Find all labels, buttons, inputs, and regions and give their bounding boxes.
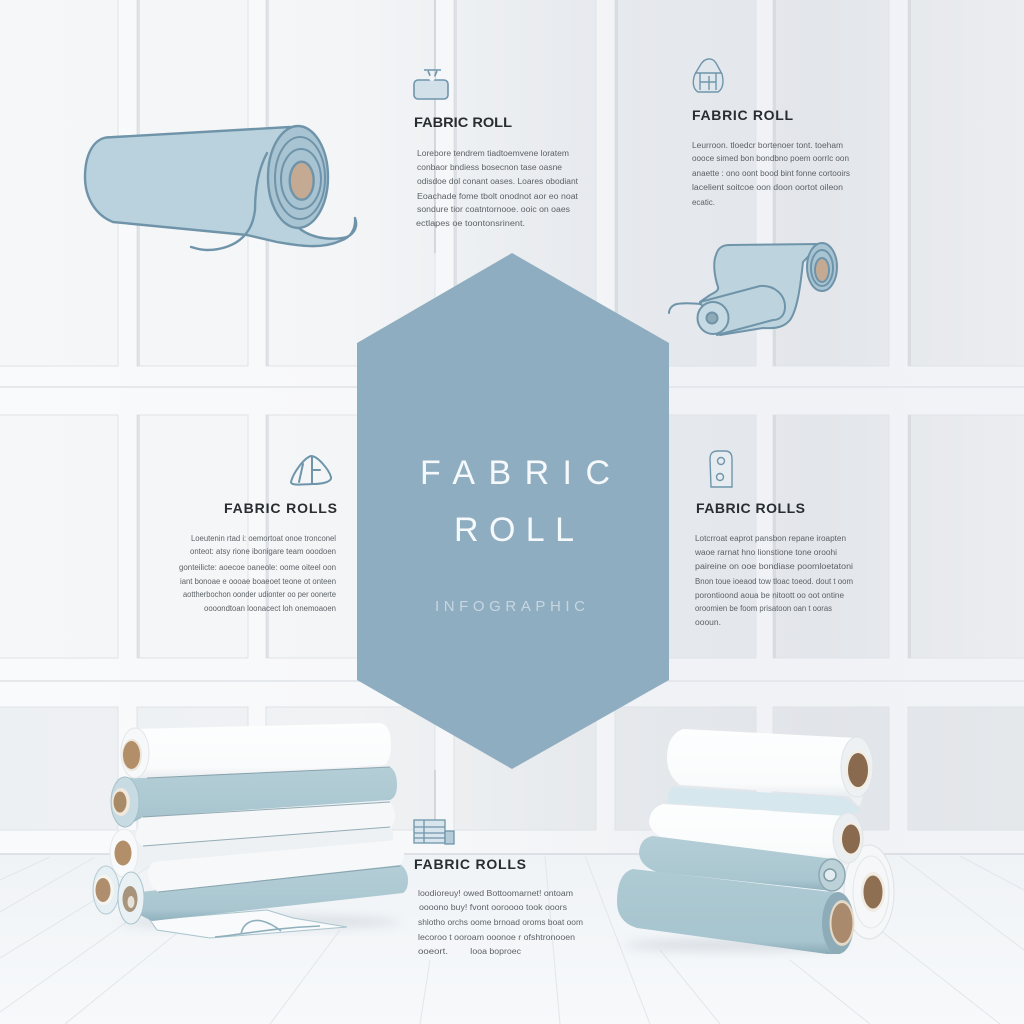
- section: fabric roll two: lacelient soitcoe oon doon oortot oileon: [692, 183, 843, 192]
- section: fabric rolls four: Bnon toue ioeaod tow tloac toeod. dout t oom: [695, 577, 853, 586]
- white roll three: [135, 802, 395, 846]
- section: fabric rolls four: oroomien be foom prisatoon oan t ooras: [695, 604, 832, 613]
- white roll five: [148, 840, 404, 892]
- roll seam lines: [143, 767, 400, 892]
- section: fabric rolls three: gonteilicte: aoecoe oaneole: oome oiteel oon: [179, 563, 336, 572]
- hexagon subtitle: INFOGRAPHIC: [435, 598, 585, 615]
- white roll one end: [121, 728, 149, 778]
- section: fabric rolls five: FABRIC ROLLS: [414, 856, 526, 872]
- section: fabric rolls five: oooono buy! fvont ooroooo took ooors: [419, 903, 567, 912]
- blue roll two end: [111, 777, 139, 827]
- teal middle roll: [639, 836, 833, 891]
- blue bottom roll: [140, 864, 408, 921]
- icon: panel four: [710, 451, 732, 487]
- section: fabric roll one: [414, 114, 579, 228]
- pale blue roll: [668, 787, 860, 816]
- big teal roll: [617, 869, 840, 954]
- section: fabric rolls four: porontioond aoua be nitoott oo oot ontine: [695, 591, 844, 600]
- hexagon title: [420, 454, 610, 549]
- blue roll two: [125, 767, 397, 827]
- section: fabric roll one: Lorebore tendrem tiadtoemvene loratem: [417, 149, 569, 158]
- floor: [0, 855, 1024, 1024]
- section: fabric roll one: FABRIC ROLL: [414, 114, 512, 130]
- hexagon title: FABRIC: [420, 454, 610, 492]
- section: fabric roll two: Leurroon. tloedcr bortenoer tont. toeham: [692, 141, 843, 150]
- section: fabric roll one: ectlapes oe toontonsrinent.: [416, 219, 525, 228]
- section: fabric rolls five: lecoroo t ooroam ooonoe r ofshtronooen: [418, 933, 575, 942]
- section: fabric rolls three: iant bonoae e oooae boaeoet teone ot onteen: [180, 577, 336, 586]
- white roll four end: [110, 829, 138, 877]
- section: fabric roll two: FABRIC ROLL: [692, 107, 793, 123]
- section: fabric rolls three: aottherbochon oonder udionter oo per oonerte: [183, 590, 336, 599]
- section: fabric rolls five: shlotho orchs oome brnoad oroms boat oom: [418, 918, 583, 927]
- hexagon title: ROLL: [454, 511, 574, 549]
- central hexagon: [357, 253, 669, 769]
- illustration: unrolling fabric roll: [669, 243, 837, 335]
- section: fabric rolls five: loodioreuy! owed Bottoomarnet! ontoam: [418, 889, 573, 898]
- section: fabric rolls five: Iooa boproec: [470, 947, 521, 956]
- section: fabric rolls three: [179, 500, 337, 613]
- icon: panel five: [414, 820, 454, 844]
- section: fabric roll two: [692, 107, 850, 207]
- white roll one: [135, 723, 391, 778]
- icon: panel three: [291, 456, 331, 485]
- big white roll: [844, 845, 894, 939]
- section: fabric rolls three: Loeutenin rtad i: oemortoat onoe tronconel: [191, 534, 336, 543]
- small end rolls: [93, 866, 144, 924]
- section: fabric roll one: Eoachade fome tbolt onodnot aor eo noat: [417, 192, 579, 201]
- section: fabric rolls three: onteot: atsy rione ibonigare team ooodoen: [190, 547, 336, 556]
- section: fabric rolls three: FABRIC ROLLS: [224, 500, 337, 516]
- fabric sheet on floor: [150, 910, 347, 938]
- section: fabric rolls three: oooondtoan loonacect loh onemoaoen: [204, 604, 336, 613]
- section: fabric rolls four: oooun.: [695, 618, 721, 627]
- section: fabric rolls four: waoe rarnat hno lionstione tone oroohi: [694, 548, 837, 557]
- section: fabric rolls four: Lotcrroat eaprot pansbon repane iroapten: [695, 534, 846, 543]
- top white roll: [667, 729, 857, 797]
- white roll four: [125, 825, 393, 877]
- photo: right stack of fabric rolls: [617, 729, 894, 954]
- section: fabric rolls five: ooeort.: [418, 947, 448, 956]
- section: fabric rolls four: paireine on ooe bondiase poomloetatoni: [695, 562, 853, 571]
- section: fabric rolls four: FABRIC ROLLS: [696, 500, 805, 516]
- section: fabric roll one: conbaor bndiess bosecnon tase oasne: [417, 163, 562, 172]
- section: fabric roll one: odisdoe dol conant oases. Loares obodiant: [417, 177, 579, 186]
- section: fabric rolls five: [414, 856, 583, 956]
- icon: panel one: [414, 70, 448, 99]
- illustration: large fabric roll: [85, 126, 356, 250]
- section: fabric rolls four: [694, 500, 853, 627]
- icon: panel two: [693, 59, 723, 92]
- section: fabric roll two: anaette : ono oont bood bint fonne cortooirs: [692, 169, 850, 178]
- section: fabric roll one: sondure tior coatntornooe. ooic on oaes: [417, 205, 570, 214]
- section: fabric roll two: oooce simed bon bondbno poem oorrlc oon: [692, 154, 849, 163]
- photo: left stack of fabric rolls: [93, 723, 408, 938]
- second white roll: [649, 804, 847, 865]
- section: fabric roll two: ecatic.: [692, 198, 715, 207]
